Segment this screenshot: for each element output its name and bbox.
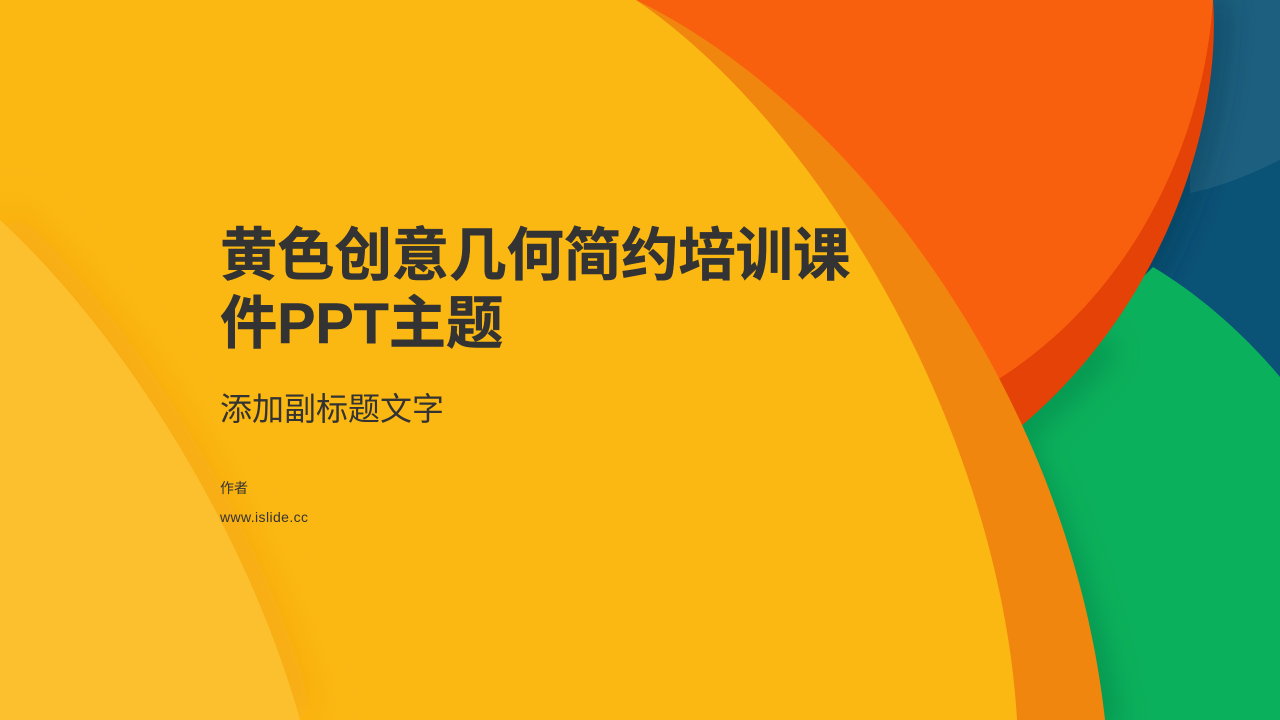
left shadow <box>0 220 300 720</box>
blue background <box>1100 0 1280 500</box>
author: 作者 <box>220 480 248 496</box>
website: www.islide.cc <box>220 509 308 525</box>
title: 黄色创意几何简约培训课 <box>220 224 850 288</box>
dark orange shape <box>600 0 1214 490</box>
subtitle: 添加副标题文字 <box>220 391 444 427</box>
green shape <box>1000 267 1280 720</box>
main yellow shape <box>0 0 1017 720</box>
bright orange shape <box>600 0 1213 450</box>
light yellow shape <box>0 220 300 720</box>
title: 件PPT主题 <box>220 292 503 356</box>
title <box>220 224 850 356</box>
